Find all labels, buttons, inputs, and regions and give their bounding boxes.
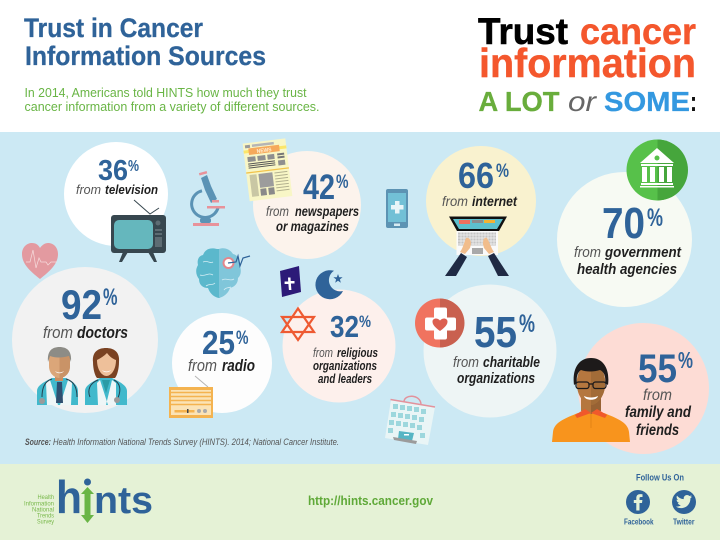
website link: http://hints.cancer.gov: [308, 494, 433, 508]
label: from internet: from: [442, 193, 468, 209]
label: from family and friends: friends: [636, 422, 679, 439]
stat: 66 percent: %: [496, 161, 509, 182]
label: from newspapers or magazines: from: [266, 204, 289, 219]
stat: 70 percent: 70: [602, 199, 645, 248]
logo wordmark: h: [56, 471, 82, 523]
social labels: [624, 516, 695, 526]
panel: doctors: [12, 267, 158, 413]
icon: male doctor: [37, 347, 78, 405]
title: Trust in Cancer: [24, 13, 203, 43]
panel: religious organizations and leaders: [280, 266, 396, 402]
title: [24, 13, 266, 71]
title: Information Sources: [25, 41, 266, 71]
panel: newspapers or magazines: [243, 138, 361, 259]
logo wordmark: nts: [94, 480, 153, 522]
stat: 36 percent: %: [128, 158, 139, 175]
panel: family and friends: [552, 323, 709, 454]
icon: man with glasses: [552, 358, 630, 442]
subtitle text: [24, 86, 320, 114]
icon: medical cross with heart: [415, 298, 464, 348]
label: from radio: from: [188, 356, 217, 375]
logo tagline: [24, 494, 55, 526]
label: from charitable organizations: organizations: [457, 370, 535, 387]
social: follow us on: Follow Us On: [636, 472, 684, 484]
stat: 42 percent: %: [336, 172, 349, 193]
label: from doctors: doctors: [77, 323, 128, 342]
logo wordmark: [56, 471, 153, 523]
icon: brain: [196, 248, 250, 298]
label: from doctors: [43, 323, 128, 342]
logo tagline: National: [32, 506, 55, 514]
label: from radio: radio: [222, 356, 255, 375]
stat: 92 percent: 92: [61, 281, 102, 328]
icon: smartphone: [386, 189, 408, 228]
source note: Source:: [25, 437, 51, 447]
heading: trust cancer information a lot or some: [478, 11, 697, 117]
label: from television: television: [105, 182, 158, 197]
panel: internet: [426, 146, 536, 276]
label: from newspapers or magazines: or magazines: [276, 219, 349, 234]
label: from newspapers or magazines: [266, 204, 359, 234]
heading: trust cancer information a lot or some: cancer: [580, 11, 696, 52]
icon: bible: [280, 266, 301, 297]
heading: trust cancer information a lot or some: :: [690, 86, 697, 117]
heading: trust cancer information a lot or some: SOME: [604, 86, 690, 117]
panel: footer background: [0, 464, 720, 540]
label: from government health agencies: from: [574, 244, 601, 261]
logo tagline: Trends: [37, 512, 55, 520]
logo tagline: Survey: [37, 518, 55, 526]
label: from newspapers or magazines: newspapers: [295, 204, 359, 219]
label: from internet: [442, 193, 518, 209]
panel: government health agencies: [557, 140, 692, 307]
stat: 55 percent charitable: %: [519, 310, 535, 338]
social labels: Facebook: [624, 516, 654, 526]
subtitle text: In 2014, Americans told HINTS how much they trust: [24, 86, 307, 100]
stat: 70 percent: %: [647, 204, 663, 232]
social labels: Twitter: [673, 516, 695, 526]
label: from religious organizations and leaders: and leaders: [318, 372, 372, 386]
label: from religious organizations and leaders: religious: [337, 346, 378, 360]
label: from family and friends: [625, 387, 692, 439]
icon: facebook: [626, 490, 650, 514]
social: follow us on: [624, 472, 696, 526]
stat: 32 percent: 32: [330, 309, 359, 344]
stat: 36 percent: 36: [98, 155, 128, 187]
heading: trust cancer information a lot or some: A LOT: [478, 86, 560, 117]
icon: twitter: [672, 490, 696, 514]
icon: hospital: [385, 396, 435, 445]
stat: 25 percent: %: [236, 328, 249, 349]
label: from religious organizations and leaders: organizations: [313, 359, 377, 373]
label: from charitable organizations: [453, 354, 540, 387]
logo tagline: Health: [38, 494, 54, 501]
source note: Health Information National Trends Survey (HINTS). 2014; National Cancer Institute.: [53, 437, 339, 447]
heading: trust cancer information a lot or some: Trust: [478, 11, 568, 52]
icon: female doctor: [85, 348, 127, 405]
subtitle text: cancer information from a variety of different sources.: [24, 100, 320, 114]
icon: heart with pulse: [22, 243, 58, 279]
panel: radio: [169, 313, 272, 418]
label: from family and friends: from: [643, 387, 672, 404]
stat: 55 percent family: %: [678, 347, 693, 373]
label: from religious organizations and leaders: from: [313, 346, 333, 360]
icon: radio: [169, 376, 213, 418]
icon: star of david: [282, 308, 314, 340]
icon: newspaper: NEWS: [256, 147, 272, 155]
heading: trust cancer information a lot or some: information: [479, 40, 696, 86]
label: from charitable organizations: from: [453, 354, 479, 371]
panel: blue background: [0, 132, 720, 464]
stat: 66 percent: 66: [458, 155, 494, 196]
panel: charitable organizations: [415, 284, 556, 418]
label: from television: from: [76, 182, 101, 197]
stat: 25 percent: 25: [202, 324, 235, 361]
label: from radio: [188, 356, 255, 375]
heading: trust cancer information a lot or some: or: [568, 86, 598, 117]
stat: 55 percent family: 55: [638, 347, 677, 391]
icon: television: [111, 200, 166, 262]
label: from doctors: from: [43, 323, 73, 342]
stat: 42 percent: 42: [303, 168, 335, 207]
logo: HINTS: [24, 471, 153, 526]
stat: 55 percent charitable: 55: [474, 308, 517, 357]
panel: television: [64, 142, 168, 262]
stat: 32 percent: %: [359, 312, 371, 331]
stat: 92 percent: %: [103, 284, 118, 311]
icon: government building: [626, 140, 688, 200]
label: from government health agencies: [574, 244, 682, 278]
label: from television: [76, 182, 158, 197]
label: from government health agencies: health agencies: [577, 261, 677, 278]
icon: crescent moon and star: [315, 270, 343, 299]
logo tagline: Information: [24, 500, 54, 508]
label: from internet: internet: [472, 193, 518, 209]
icon: microscope: [192, 171, 225, 226]
label: from family and friends: family and: [625, 404, 692, 421]
label: from charitable organizations: charitable: [483, 354, 540, 371]
label: from religious organizations and leaders: [313, 346, 378, 386]
label: from government health agencies: government: [604, 244, 682, 261]
icon: laptop with hands: [445, 216, 509, 276]
